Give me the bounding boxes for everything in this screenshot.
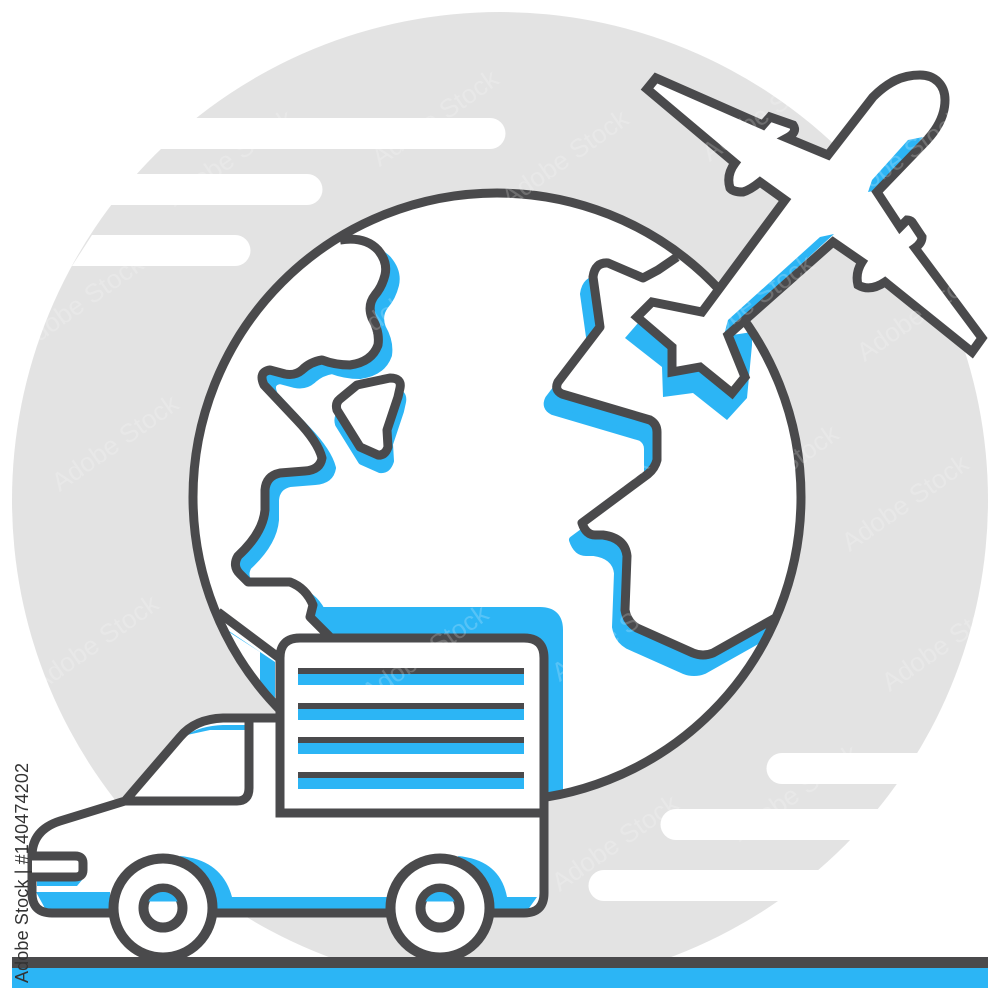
- watermark: Adobe Stock: [706, 417, 845, 527]
- watermark: Adobe Stock: [851, 787, 990, 897]
- cargo box shadow: [324, 607, 563, 792]
- watermark: Adobe Stock: [681, 247, 820, 357]
- lower-left globe shadow: [220, 625, 275, 702]
- rear wheel: [390, 858, 490, 958]
- watermark: Adobe Stock: [546, 577, 685, 687]
- right continent: [561, 270, 796, 650]
- front wheel: [114, 858, 212, 958]
- watermark: Adobe Stock: [696, 57, 835, 167]
- watermark: Adobe Stock: [366, 62, 505, 172]
- blue shadows inside globe: [160, 249, 841, 820]
- cargo box: [280, 638, 544, 813]
- watermark: Adobe Stock: [516, 447, 655, 557]
- left continent shadow: [240, 252, 400, 607]
- watermark: Adobe Stock: [496, 102, 635, 212]
- watermark: Adobe Stock: [356, 597, 495, 707]
- watermark: Adobe Stock: [726, 737, 865, 847]
- truck: [32, 638, 544, 958]
- watermark: Adobe Stock: [851, 257, 990, 367]
- plane fill: [637, 75, 982, 393]
- truck body outline: [32, 718, 544, 913]
- stock id: Adobe Stock | #140474202: [12, 763, 32, 983]
- globe: [188, 188, 806, 802]
- cab window: [125, 720, 249, 801]
- island: [336, 378, 400, 455]
- watermark: Adobe Stock: [36, 52, 175, 162]
- cargo stripes: [298, 671, 524, 789]
- left continent: [198, 245, 382, 650]
- airplane: [637, 75, 982, 393]
- plane tail shadow: [625, 315, 752, 420]
- headlight: [32, 856, 83, 877]
- truck body fill: [32, 718, 544, 913]
- watermark: Adobe Stock: [161, 102, 300, 212]
- plane outline: [637, 75, 982, 393]
- watermark: Adobe Stock: [346, 237, 485, 347]
- watermark: Adobe Stock: [546, 787, 685, 897]
- road: [12, 957, 988, 988]
- island shadow: [338, 392, 402, 469]
- watermark: Adobe Stock: [376, 407, 515, 517]
- watermark: Adobe Stock: [11, 247, 150, 357]
- watermark: Adobe Stock: [831, 102, 970, 212]
- right continent shadow: [544, 278, 766, 676]
- speed streaks: [72, 118, 925, 901]
- body shadow: [36, 725, 537, 912]
- fuselage shadow strips: [724, 137, 923, 335]
- watermark: Adobe Stock: [46, 387, 185, 497]
- watermark: Adobe Stock: [26, 587, 165, 697]
- watermark: Adobe Stock: [836, 447, 975, 557]
- globe outline: [193, 193, 801, 801]
